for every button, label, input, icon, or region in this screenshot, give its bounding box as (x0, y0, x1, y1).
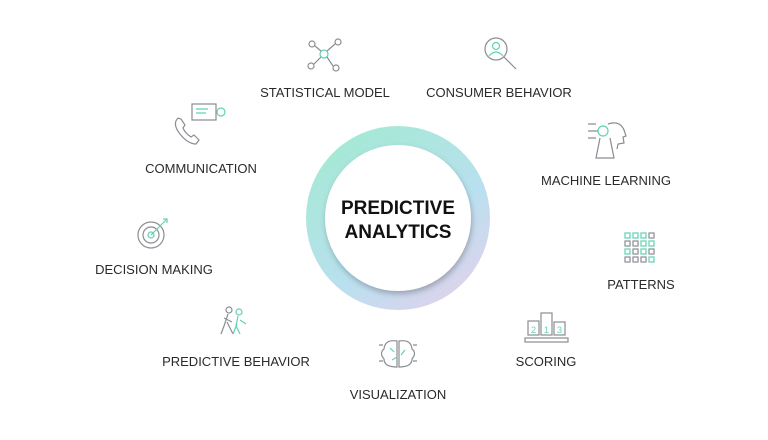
icon: brain (379, 341, 417, 367)
title line 2: ANALYTICS (345, 222, 451, 243)
item: visualization (350, 341, 446, 402)
icon: robot head (588, 123, 626, 158)
icon: target (138, 219, 167, 248)
icon: phone with chat (175, 104, 225, 144)
item: machine learning (541, 123, 671, 188)
icon: podium (525, 313, 568, 342)
icon: podium: 3 (557, 325, 562, 335)
item: patterns: PATTERNS (607, 277, 675, 292)
icon: podium: 1 (544, 325, 549, 335)
item: scoring: SCORING (516, 354, 576, 369)
item: decision making (95, 219, 213, 277)
central ring (306, 126, 490, 310)
icon: network (308, 39, 341, 71)
title: PREDICTIVE (341, 198, 455, 219)
item: statistical model (260, 39, 390, 100)
icon: grid (625, 233, 654, 262)
icon: walking people (221, 307, 246, 334)
item: communication (145, 104, 257, 176)
item: machine learning: MACHINE LEARNING (541, 173, 671, 188)
item: communication: COMMUNICATION (145, 161, 257, 176)
icon: magnifier person (485, 38, 516, 69)
item: predictive behavior (162, 307, 310, 369)
item: visualization: VISUALIZATION (350, 387, 446, 402)
icon: podium: 2 (531, 325, 536, 335)
item: patterns (607, 233, 675, 292)
item: statistical model: STATISTICAL MODEL (260, 85, 390, 100)
item: consumer behavior: CONSUMER BEHAVIOR (426, 85, 572, 100)
item: predictive behavior: PREDICTIVE BEHAVIOR (162, 354, 310, 369)
item: scoring (516, 313, 576, 369)
item: consumer behavior (426, 38, 572, 100)
item: decision making: DECISION MAKING (95, 262, 213, 277)
